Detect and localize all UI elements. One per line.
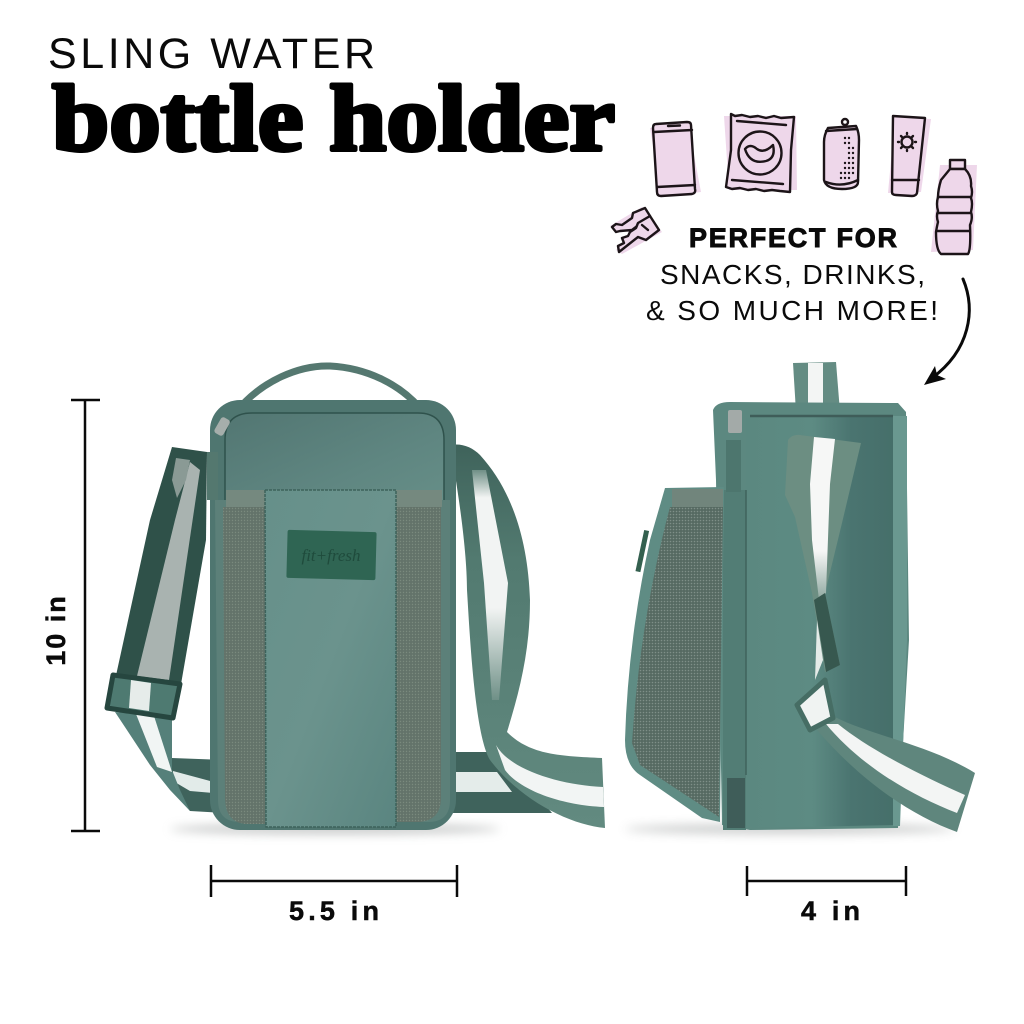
shoulder strap lower <box>817 717 975 832</box>
dimension: width 5.5 in: 5.5 in <box>289 896 379 926</box>
side view bag <box>625 362 975 834</box>
top panel <box>225 413 444 510</box>
icon: water bottle <box>931 160 977 254</box>
body <box>713 402 909 830</box>
buckle <box>107 675 180 718</box>
right edge strip <box>893 416 907 826</box>
callout text: PERFECT FOR <box>689 223 897 253</box>
left strap upper <box>115 447 207 690</box>
zipper pull <box>726 410 742 492</box>
side buckle <box>797 680 833 730</box>
callout text: SNACKS, DRINKS, <box>660 259 925 290</box>
callout text <box>646 223 938 326</box>
icon: keys <box>610 207 662 254</box>
zipper bottom <box>727 778 745 828</box>
top handle <box>793 362 840 413</box>
rear strap section left <box>172 758 225 813</box>
center flap <box>265 490 396 827</box>
title: bottle holder <box>52 67 615 171</box>
icon: snack bag <box>724 114 797 192</box>
dimension: width 5.5 in <box>211 865 457 926</box>
title <box>48 30 615 171</box>
logo patch <box>286 530 377 580</box>
right strap <box>450 444 605 828</box>
top seam <box>750 415 893 417</box>
shoulder strap upper <box>785 435 861 680</box>
arrow <box>924 279 969 385</box>
dimension: depth 4 in: 4 in <box>801 896 860 926</box>
front view bag <box>107 366 605 834</box>
logo patch: fit+fresh <box>301 546 361 565</box>
icon: sunscreen <box>888 116 931 196</box>
icon: can <box>824 119 859 189</box>
icon: phone <box>650 122 701 197</box>
dimension: height 10 in: 10 in <box>41 594 71 666</box>
title: SLING WATER <box>48 30 375 78</box>
bag body <box>210 400 456 830</box>
left strap lower <box>115 712 190 811</box>
panel seam <box>745 490 747 775</box>
rear strap section right <box>450 752 552 813</box>
side pocket <box>625 487 724 822</box>
handle <box>236 366 420 412</box>
zipper pull <box>207 416 231 500</box>
dimension: depth 4 in <box>747 866 906 926</box>
icons: items that fit <box>610 114 977 254</box>
main panel <box>746 416 893 828</box>
zipper strip <box>723 490 746 830</box>
elastic band <box>226 490 442 507</box>
mesh pockets <box>223 507 441 824</box>
dimension: height 10 in <box>41 400 100 831</box>
callout text: & SO MUCH MORE! <box>646 295 938 326</box>
lower panel <box>215 500 450 822</box>
